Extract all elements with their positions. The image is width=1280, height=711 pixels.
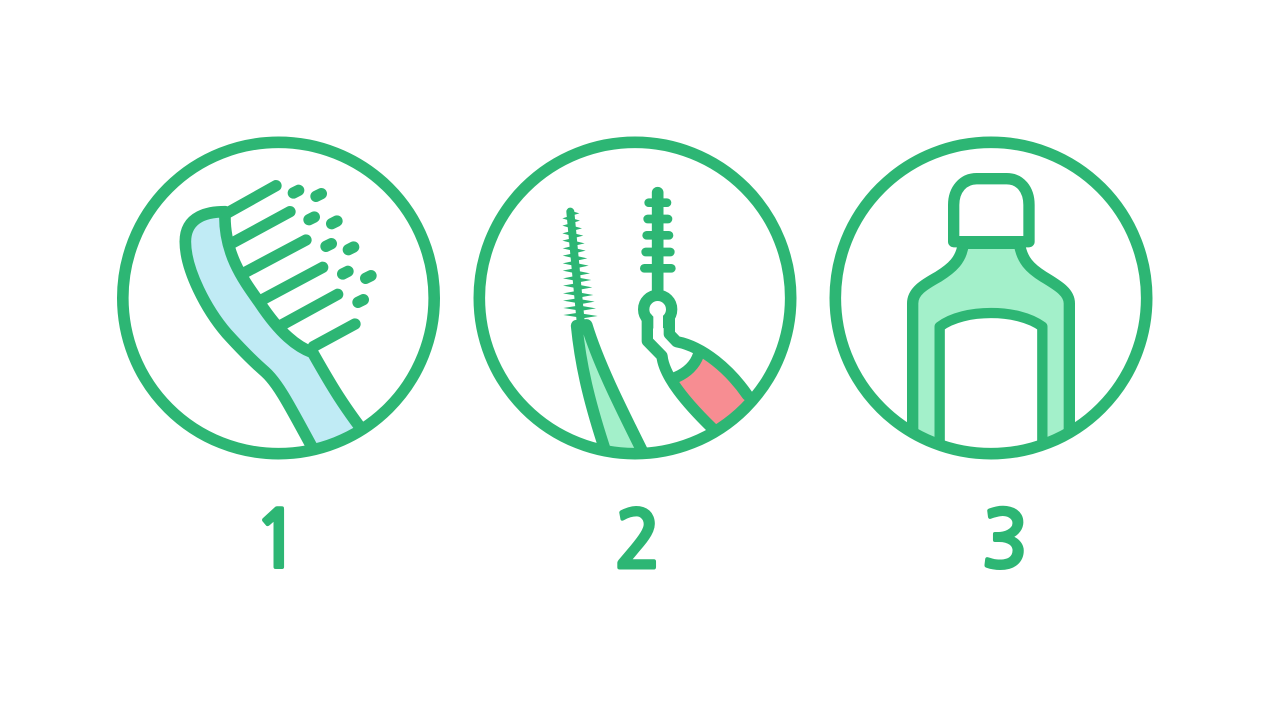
bottle cap [954, 179, 1029, 242]
brush wire bristles [644, 203, 671, 268]
toothbrush handle and head [185, 212, 375, 462]
red brush handle fill [679, 359, 745, 424]
brush wire stem [652, 186, 664, 291]
interdental pick shaft [570, 212, 581, 322]
icon: interdental brushes [479, 142, 791, 467]
bristle tips [293, 190, 371, 302]
bottle body [913, 243, 1069, 453]
bottle label [940, 313, 1042, 453]
icon: toothbrush [123, 142, 434, 462]
step number 1: 1 [253, 501, 301, 580]
circle outline 3 [835, 142, 1147, 454]
infographic: three oral care steps [117, 136, 1152, 570]
step number 2: 2 [614, 501, 662, 580]
brush loop [644, 295, 672, 323]
step number 3: 3 [981, 501, 1029, 580]
circle outline 1 [123, 142, 434, 454]
brush handle outline [647, 318, 747, 428]
circle outline 2 [479, 142, 791, 454]
icon: mouthwash bottle [835, 142, 1147, 454]
interdental pick bristles [562, 211, 598, 319]
brush neck fill [653, 316, 663, 329]
bristles [227, 186, 355, 347]
interdental pick handle [577, 325, 650, 467]
